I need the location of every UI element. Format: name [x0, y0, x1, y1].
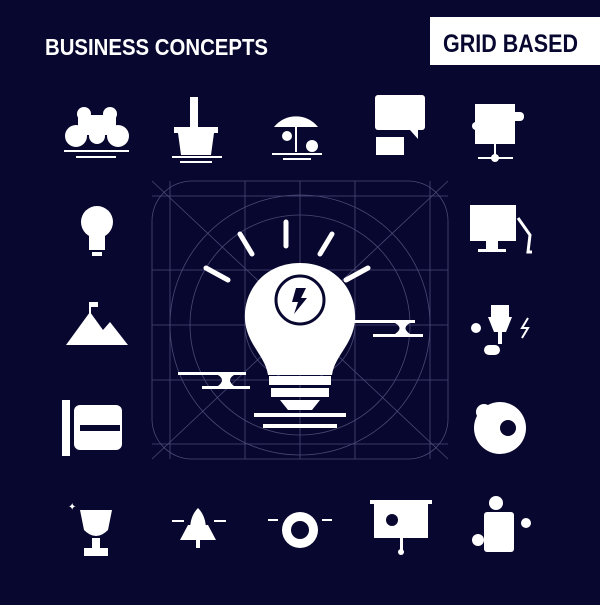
- row 3 icons: [66, 302, 528, 355]
- icon: binoculars: [64, 107, 129, 158]
- row 5 icons: [68, 496, 531, 556]
- icon: chat chart money: [375, 95, 425, 155]
- icon: presentation board: [370, 500, 432, 555]
- icon: folder network: [472, 104, 524, 162]
- badge: grid based: GRID BASED: [443, 30, 578, 58]
- icon: plant signpost: [172, 97, 222, 163]
- icon: notebook pencil: [62, 400, 122, 456]
- icon: gear pie chart: [474, 402, 526, 454]
- row 1 icons: [64, 95, 524, 163]
- row 2 icons: [81, 205, 532, 256]
- icon: rocket: [172, 508, 226, 548]
- icon: lifebuoy: [268, 512, 332, 548]
- icon: trophy: [68, 502, 112, 556]
- badge: grid based: [430, 17, 600, 65]
- icon: plug: [471, 305, 528, 355]
- title: BUSINESS CONCEPTS: [45, 34, 268, 60]
- grid background: [152, 181, 448, 459]
- icon: document question: [472, 496, 531, 552]
- icon: brain bulb: [81, 206, 113, 256]
- icon: trophy: ✦: [68, 502, 76, 513]
- icon: mountain flag: [66, 302, 128, 345]
- main icon: light bulb: [178, 222, 423, 428]
- row 4 icons: [62, 400, 526, 456]
- icon: umbrella money: [272, 116, 322, 160]
- icon: design monitor: [470, 205, 532, 252]
